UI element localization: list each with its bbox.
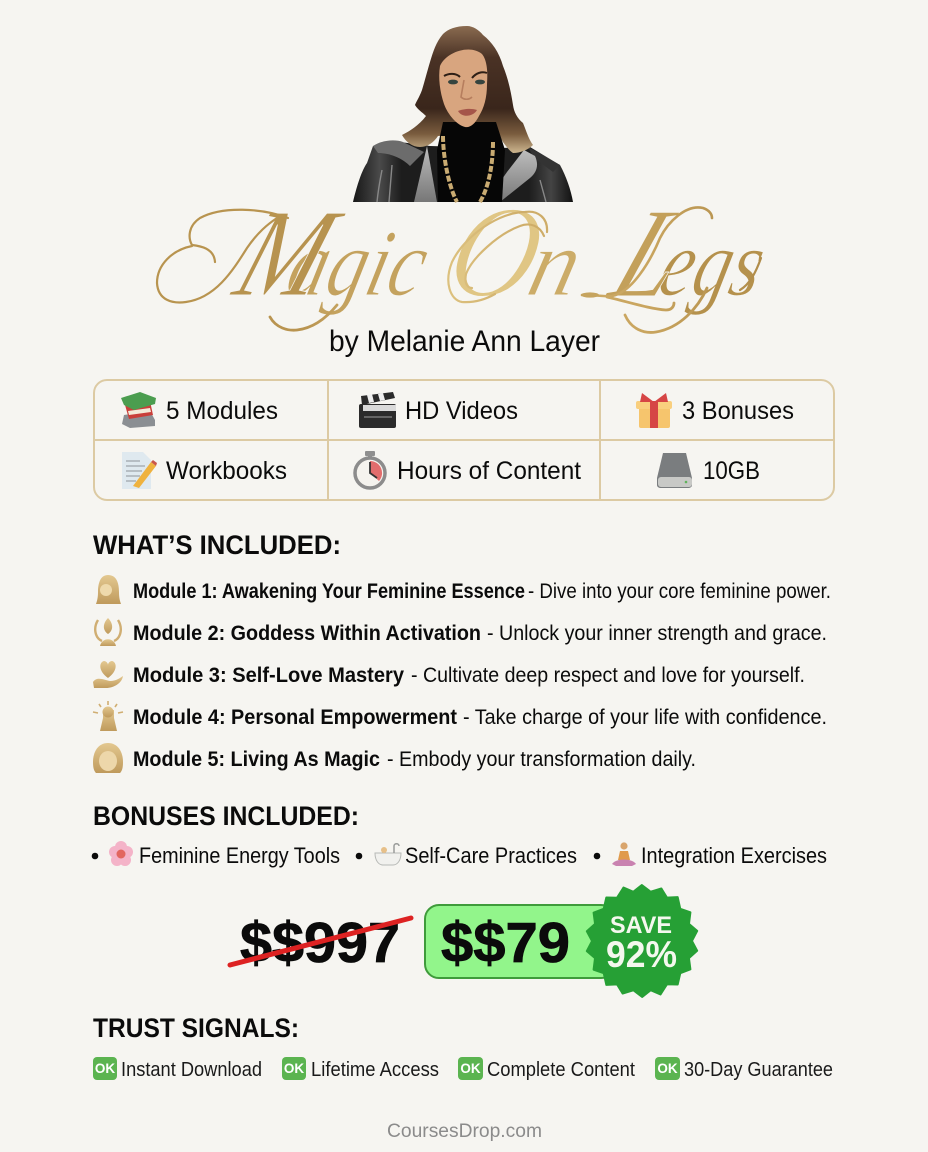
badge: save 92% xyxy=(577,877,707,1005)
list: modules xyxy=(93,575,831,773)
title: Magic On Legs: O xyxy=(437,178,556,325)
module 3: Module 3: Self-Love Mastery xyxy=(133,663,404,687)
footer: site name: CoursesDrop.com xyxy=(387,1120,542,1142)
portrait: Melanie Ann Layer xyxy=(353,26,573,202)
icon: heart in hand gold xyxy=(93,661,123,688)
text: HD Videos: HD Videos xyxy=(405,397,518,425)
title: Magic On Legs xyxy=(157,178,776,332)
text: 10GB: 10GB xyxy=(703,457,760,485)
icon: goddess gold xyxy=(95,618,121,646)
trust: lifetime access: Lifetime Access xyxy=(311,1059,439,1081)
trust: 30-day guarantee: 30-Day Guarantee xyxy=(684,1059,833,1081)
row: trust signals xyxy=(93,1057,833,1081)
trust: complete content: OK xyxy=(460,1061,481,1076)
text: Workbooks: Workbooks xyxy=(166,457,287,485)
title: Magic On Legs: egs xyxy=(650,210,776,316)
module 5: Module 5: Living As Magic xyxy=(133,747,380,771)
list: bonuses xyxy=(92,841,827,868)
bonus: self-care practices: Self-Care Practices xyxy=(405,843,577,868)
module 1 xyxy=(133,579,831,603)
module 3 xyxy=(133,663,805,687)
badge: save 92%: SAVE xyxy=(610,912,672,939)
subtitle: author: by Melanie Ann Layer xyxy=(329,325,600,358)
heading: what's included: WHAT’S INCLUDED: xyxy=(93,530,341,560)
trust: instant download: OK xyxy=(95,1061,115,1076)
panel: feature grid xyxy=(94,380,834,500)
text: Hours of Content: Hours of Content xyxy=(397,457,581,485)
module 2: - Unlock your inner strength and grace. xyxy=(487,621,827,645)
icon: hard drive xyxy=(657,453,692,488)
trust: 30-day guarantee: OK xyxy=(657,1061,678,1076)
trust: instant download: Instant Download xyxy=(121,1059,262,1081)
title flourishes xyxy=(157,207,761,332)
module 1: Module 1: Awakening Your Feminine Essence xyxy=(133,579,525,603)
module 2 xyxy=(133,621,827,645)
title: Magic On Legs: agic xyxy=(278,210,439,316)
trust: complete content: Complete Content xyxy=(487,1059,635,1081)
module 4: Module 4: Personal Empowerment xyxy=(133,705,457,729)
icon: books xyxy=(121,392,156,428)
module 5 xyxy=(133,747,696,771)
module 1: - Dive into your core feminine power. xyxy=(528,579,831,603)
price: current xyxy=(425,905,615,978)
badge: save 92%: 92% xyxy=(606,934,677,975)
title: swash terminal xyxy=(581,292,599,298)
module 4: - Take charge of your life with confidence. xyxy=(463,705,827,729)
icon: woman gold xyxy=(96,575,121,604)
title: Magic On Legs: M xyxy=(219,184,357,322)
icon: gift xyxy=(636,393,672,428)
module 5: - Embody your transformation daily. xyxy=(387,747,696,771)
bonus: feminine energy tools xyxy=(92,841,340,868)
icon: stopwatch xyxy=(355,451,385,488)
trust: lifetime access: OK xyxy=(284,1061,304,1076)
icon: raised fist gold xyxy=(93,701,123,731)
price: original crossed out: $$997 xyxy=(240,911,400,975)
heading: trust signals: TRUST SIGNALS: xyxy=(93,1013,299,1043)
title: Magic On Legs: L xyxy=(593,182,710,324)
text: 3 Bonuses: 3 Bonuses xyxy=(682,397,794,425)
price: current: $$79 xyxy=(441,911,570,975)
title: Magic On Legs: n xyxy=(519,210,593,316)
module 4 xyxy=(133,705,827,729)
icon: clapperboard xyxy=(359,392,396,428)
icon: smiling woman gold xyxy=(93,743,123,773)
text: 5 Modules: 5 Modules xyxy=(166,397,278,425)
bonus: feminine energy tools: Feminine Energy Tools xyxy=(139,843,340,868)
heading: bonuses included: BONUSES INCLUDED: xyxy=(93,801,359,831)
module 3: - Cultivate deep respect and love for yourself. xyxy=(411,663,805,687)
icon: memo with pencil xyxy=(122,452,157,489)
bonus: integration exercises: Integration Exercises xyxy=(641,843,827,868)
module 2: Module 2: Goddess Within Activation xyxy=(133,621,481,645)
